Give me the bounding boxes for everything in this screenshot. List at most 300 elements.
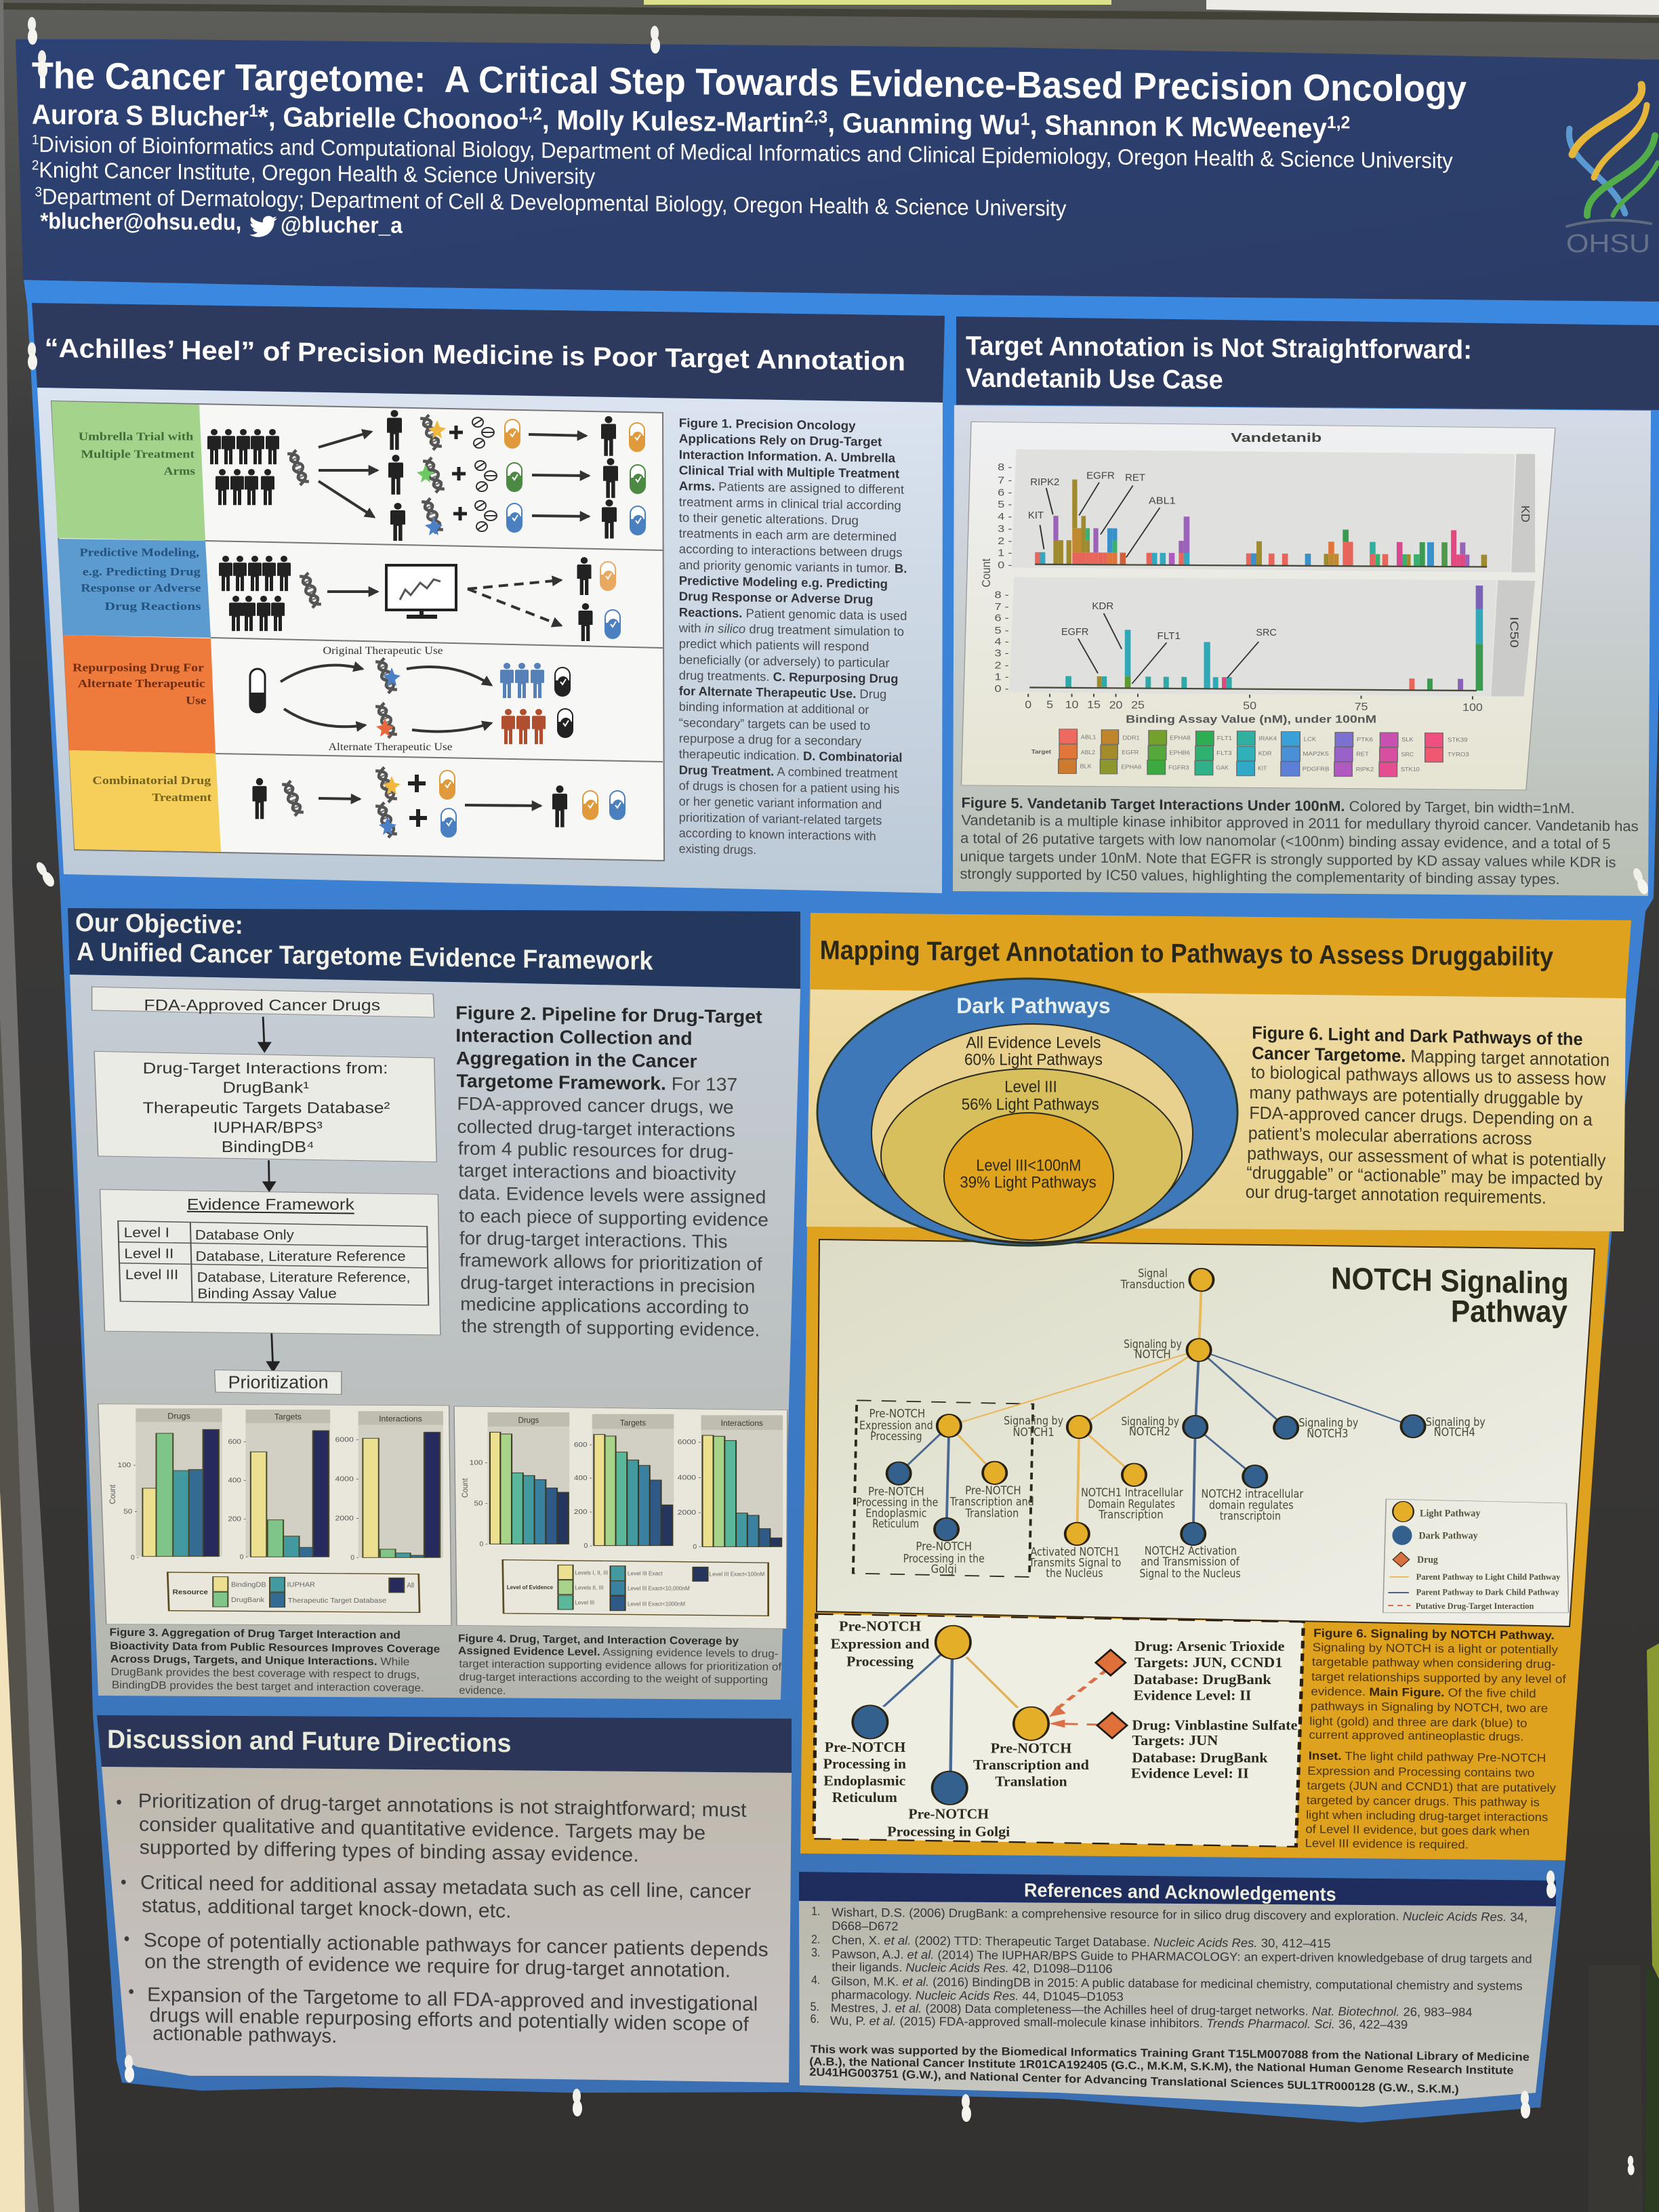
node labels: NOTCH1 Intracellular	[1081, 1487, 1183, 1499]
figure 5 chart: SLK	[1401, 737, 1414, 743]
drug diamonds and arrows	[1049, 1650, 1127, 1738]
box: evidence framework table: Evidence Framework	[187, 1196, 354, 1213]
figure 5 chart	[961, 422, 1555, 790]
category labels: Arms	[163, 465, 195, 478]
node labels: Signaling by	[1121, 1416, 1179, 1428]
figure 4 bar chart: 0 -	[584, 1542, 592, 1549]
row A icons	[207, 410, 645, 541]
panel header	[956, 316, 1659, 410]
drug annotations: Database: DrugBank	[1134, 1672, 1271, 1687]
figure 4 legend: Level III Exact<1000nM	[628, 1601, 685, 1607]
figure 2 caption: medicine applications according to	[460, 1294, 749, 1318]
figure 4 bar chart: 6000 -	[678, 1439, 701, 1446]
panel: references and acknowledgements	[799, 1872, 1556, 2107]
figure 1 caption: Clinical Trial with Multiple Treatment	[679, 463, 899, 480]
bullet list: on the strength of evidence we require for drug-target annotation.	[144, 1950, 731, 1982]
axes labels: 25	[1131, 699, 1145, 712]
box: data sources: Drug-Target Interactions from:	[143, 1060, 388, 1078]
category labels: Drug Reactions	[105, 600, 201, 613]
figure 1 caption: Applications Rely on Drug-Target	[679, 431, 882, 449]
nested ellipse diagram: 39% Light Pathways	[960, 1173, 1097, 1191]
arrow	[259, 1017, 270, 1051]
node labels: transcriptoin	[1220, 1510, 1281, 1523]
figure 2 caption: framework allows for prioritization of	[459, 1250, 762, 1275]
figure 1 caption: or her genetic variant information and	[679, 794, 882, 812]
figure 5 chart: FLT3	[1216, 751, 1232, 756]
heading: A Unified Cancer Targetome Evidence Framework	[77, 937, 653, 976]
dashed inset marker	[853, 1400, 1033, 1577]
facet IC50: 2 -	[995, 659, 1009, 671]
figure 2 caption: for drug-target interactions. This	[459, 1228, 728, 1252]
authors: Aurora S Blucher	[32, 99, 1103, 141]
panel header	[32, 303, 945, 403]
category: repurposing	[63, 635, 216, 754]
figure 4 bar chart: 200 -	[574, 1509, 592, 1516]
references list: Chen, X. et al. (2002) TTD: Therapeutic Target Database. Nucleic Acids Res. 30, 412–415	[832, 1933, 1331, 1950]
figure 2 caption: Figure 2. Pipeline for Drug-Target	[455, 1003, 762, 1027]
arrow	[267, 1334, 279, 1371]
network legend: Putative Drug-Target Interaction	[1416, 1602, 1534, 1611]
facet KD: 0 -	[998, 559, 1012, 571]
title and authors: 1,2	[1327, 112, 1350, 132]
figure 3 legend	[167, 1572, 419, 1612]
KD annotations: KIT	[1028, 509, 1044, 520]
axes labels: 15	[1087, 699, 1101, 711]
figure 3 bar chart: 600 -	[228, 1438, 246, 1446]
figure 5 chart: PTK6	[1357, 737, 1373, 743]
figure 3 legend: BindingDB	[231, 1581, 266, 1589]
figure 5 chart: FGFR3	[1168, 765, 1189, 771]
axes labels: 0	[1025, 699, 1031, 711]
node labels: NOTCH4	[1434, 1427, 1475, 1439]
network edges	[899, 1280, 1413, 1534]
facet IC50	[995, 577, 1535, 696]
figure 8 caption on orange: evidence. Main Figure. Of the five child	[1311, 1685, 1536, 1700]
facet IC50: 3 -	[995, 647, 1009, 659]
figure 4 bar chart: 400 -	[574, 1475, 592, 1482]
figure 5 chart: GAK	[1216, 765, 1229, 771]
box: data sources: Therapeutic Targets Database²	[143, 1099, 390, 1117]
figure 8 caption on orange	[1305, 1626, 1566, 1852]
figure 5 chart: LCK	[1304, 737, 1316, 743]
row C icons: Original Therapeutic Use	[323, 645, 443, 657]
figure 3 caption	[109, 1626, 440, 1694]
affiliations: 3	[35, 184, 42, 199]
node labels: Processing	[870, 1431, 922, 1443]
category labels: e.g. Predicting Drug	[83, 566, 201, 578]
category: predictive modeling	[58, 539, 211, 638]
figure 4 legend	[503, 1560, 769, 1616]
axes labels: 100	[1462, 701, 1483, 714]
figure 4 bar chart: Drugs	[518, 1416, 539, 1425]
box: FDA approved drugs: FDA-Approved Cancer Drugs	[144, 997, 380, 1015]
figure 2 caption	[455, 1003, 769, 1340]
drug annotations: Targets: JUN, CCND1	[1134, 1655, 1283, 1671]
references list: 6.	[811, 2011, 819, 2026]
facet IC50: 4 -	[995, 636, 1009, 647]
drug annotations: Drug: Arsenic Trioxide	[1134, 1639, 1285, 1654]
inset labels: Pre-NOTCH	[991, 1741, 1071, 1756]
authors: 1	[1021, 109, 1030, 129]
figure 5 chart: ABL2	[1081, 750, 1095, 756]
KD annotations: EGFR	[1086, 470, 1115, 481]
top edge strip	[0, 0, 1659, 23]
figure 5 chart: EPHB6	[1169, 750, 1190, 756]
facet IC50: 8 -	[995, 589, 1009, 600]
figure 1 caption: prioritization of variant-related targets	[679, 810, 882, 827]
figure 1 caption: of drugs is chosen for a patient using his	[679, 778, 899, 796]
node labels: NOTCH2 intracellular	[1202, 1488, 1304, 1500]
figure 4 bar chart	[454, 1406, 787, 1629]
references list	[811, 1904, 1532, 2032]
figure 2 caption: Targetome Framework. For 137	[457, 1071, 737, 1095]
figure 1 caption: Drug Treatment. A combined treatment	[679, 762, 898, 781]
figure 4 legend: Level III Exact<10,000nM	[628, 1586, 690, 1592]
figure 1 caption: predict which patients will respond	[679, 636, 869, 654]
figure 3 legend: Therapeutic Target Database	[288, 1597, 386, 1604]
facet KD: 7 -	[998, 474, 1012, 486]
drug annotations: Database: DrugBank	[1132, 1750, 1268, 1765]
category labels: Use	[186, 695, 206, 707]
figure 4 caption	[458, 1633, 782, 1700]
box: evidence framework table: Binding Assay Value	[197, 1286, 337, 1301]
bullet list: Critical need for additional assay metadata such as cell line, cancer	[140, 1871, 751, 1903]
node labels: NOTCH2 Activation	[1145, 1545, 1237, 1557]
node labels: Signaling by	[1004, 1415, 1063, 1427]
panel body	[70, 975, 800, 1700]
category: combinatorial	[69, 750, 221, 852]
KD annotations	[1028, 470, 1176, 520]
box: evidence framework table	[100, 1189, 441, 1335]
figure 5 chart: EPHA8	[1170, 735, 1191, 741]
inset edges	[884, 1655, 952, 1771]
figure 5 chart: EPHA6	[1121, 764, 1142, 771]
facet IC50: 7 -	[995, 600, 1009, 612]
figure 4 legend: Level III	[575, 1600, 594, 1606]
figure 5 chart: FLT1	[1217, 736, 1232, 742]
node labels: the Nucleus	[1046, 1568, 1103, 1580]
category labels: Treatment	[152, 792, 212, 804]
node labels: Transcription	[1099, 1509, 1164, 1521]
header banner	[16, 39, 1659, 302]
node labels: Transmits Signal to	[1029, 1557, 1121, 1570]
references list: 2.	[811, 1932, 820, 1946]
figure 4 caption: evidence.	[459, 1684, 506, 1697]
box: evidence framework table: Level I	[124, 1225, 169, 1240]
figure 4 legend: Level III Exact	[628, 1570, 663, 1576]
axes labels: Binding Assay Value (nM), under 100nM	[1126, 714, 1376, 726]
heading: Discussion and Future Directions	[107, 1725, 511, 1758]
figure 5 chart: MAP2K5	[1303, 751, 1329, 757]
figure 3 bar chart: 2000 -	[335, 1515, 359, 1522]
authors: 2,3	[804, 106, 827, 127]
figure 1 caption	[678, 415, 907, 859]
node labels: Pre-NOTCH	[965, 1484, 1021, 1497]
bullet list: Scope of potentially actionable pathways for cancer patients depends	[144, 1929, 769, 1961]
authors: 1,2	[519, 104, 542, 123]
node labels: Reticulum	[872, 1517, 919, 1530]
facet KD: 1 -	[998, 547, 1012, 558]
cream body	[806, 989, 1626, 1231]
node labels: Golgi	[931, 1563, 957, 1576]
references list: 4.	[811, 1973, 820, 1987]
facet IC50: 0 -	[995, 682, 1009, 694]
box: evidence framework table: Level II	[124, 1246, 173, 1261]
figure 4 legend: Levels II, III	[575, 1584, 603, 1591]
figure 5 chart: STK39	[1448, 737, 1468, 743]
figure 1 caption: drug treatments. C. Repurposing Drug	[679, 668, 898, 686]
inset labels: Expression and	[831, 1637, 930, 1652]
figure 2 caption: data. Evidence levels were assigned	[458, 1183, 766, 1208]
figure 5 caption: Figure 5. Vandetanib Target Interactions Under 100nM. Colored by Target, bin width=1nM.	[961, 794, 1574, 817]
figure 1 caption: Interaction Information. A. Umbrella	[679, 447, 896, 465]
figure 2 caption: drug-target interactions in precision	[460, 1273, 755, 1297]
figure 1 caption: treatment arms in clinical trial according	[679, 495, 901, 512]
acknowledgements	[809, 2043, 1530, 2096]
nested ellipse diagram: Dark Pathways	[956, 994, 1111, 1018]
box: prioritization	[215, 1370, 342, 1394]
figure 3 caption: Across Drugs, Targets, and Unique Interactions. While	[110, 1653, 409, 1668]
node labels: NOTCH1	[1012, 1426, 1054, 1439]
node labels: Signal to the Nucleus	[1140, 1568, 1241, 1580]
node labels	[856, 1267, 1486, 1580]
node labels: Transcription and	[949, 1496, 1034, 1509]
figure 4 bar chart: 100 -	[470, 1459, 488, 1467]
drug annotations: Evidence Level: II	[1131, 1765, 1249, 1781]
KD annotations: RIPK2	[1030, 476, 1059, 487]
figure 1 caption: Drug Response or Adverse Drug	[679, 589, 873, 607]
inset labels: Pre-NOTCH	[908, 1806, 989, 1822]
figure 5 chart: TYRO3	[1448, 752, 1469, 758]
references list: pharmacology. Nucleic Acids Res. 44, D1045–D1053	[831, 1988, 1124, 2003]
figure 5 chart: IRAK4	[1258, 736, 1277, 742]
figure 1 caption: “secondary” targets can be used to	[679, 715, 870, 733]
affiliations: 1	[32, 132, 39, 147]
panel body	[102, 1767, 792, 2083]
node labels: and Transmission of	[1141, 1556, 1240, 1568]
figure 4 caption: Figure 4. Drug, Target, and Interaction Coverage by	[458, 1633, 739, 1647]
panel body	[37, 388, 943, 893]
figure 5 chart: DDR1	[1122, 735, 1140, 741]
network title	[1331, 1261, 1569, 1328]
figure 2 caption: FDA-approved cancer drugs, we	[457, 1094, 734, 1118]
node labels: Pre-NOTCH	[869, 1408, 925, 1420]
figure 5 chart: STK10	[1401, 767, 1420, 773]
node labels: Signaling by	[1124, 1338, 1182, 1351]
figure 2 caption: collected drug-target interactions	[457, 1117, 735, 1141]
figure 3 caption: Figure 3. Aggregation of Drug Target Interaction and	[109, 1626, 401, 1641]
figure 2 caption: Interaction Collection and	[455, 1025, 693, 1049]
drug annotations: Targets: JUN	[1132, 1733, 1218, 1748]
facet KD: 8 -	[998, 461, 1012, 472]
nested ellipse diagram: All Evidence Levels	[966, 1033, 1101, 1052]
figure 4 bar chart: 2000 -	[678, 1509, 701, 1517]
IC50 annotations: EGFR	[1061, 626, 1088, 637]
figure 2 caption: target interactions and bioactivity	[458, 1160, 737, 1185]
node labels: Signal	[1138, 1267, 1168, 1279]
figure 3 bar chart: 0 -	[131, 1554, 139, 1561]
axes labels: 10	[1065, 699, 1079, 711]
facet KD: 5 -	[998, 498, 1012, 510]
icon: twitter bird	[249, 216, 277, 237]
figure 1 caption: Figure 1. Precision Oncology	[679, 415, 856, 433]
facet KD	[998, 449, 1535, 572]
figure 1 caption: for Alternate Therapeutic Use. Drug	[679, 684, 886, 701]
facet KD: KD	[1519, 506, 1532, 523]
facet IC50: 1 -	[995, 671, 1009, 682]
node labels: NOTCH3	[1307, 1428, 1348, 1440]
figure 3 bar chart: Interactions	[379, 1414, 422, 1423]
box: evidence framework table: Level III	[125, 1267, 178, 1282]
figure 5 chart: KDR	[1258, 751, 1272, 757]
references list: 3.	[811, 1945, 820, 1959]
pipeline flowchart	[92, 987, 441, 1394]
inset labels: Processing	[846, 1654, 914, 1669]
figure 4 bar chart: 0 -	[480, 1540, 488, 1548]
NOTCH signaling pathway network: Signaling by	[1426, 1416, 1486, 1429]
figure 1 caption: therapeutic indication. D. Combinatorial	[679, 747, 903, 764]
figure 2 caption: to each piece of supporting evidence	[459, 1206, 769, 1231]
figure 4 bar chart: 0 -	[693, 1543, 701, 1551]
inset labels: Translation	[995, 1774, 1067, 1789]
chart title: Vandetanib	[1231, 430, 1322, 445]
drug annotations: Evidence Level: II	[1134, 1687, 1251, 1703]
figure 5 chart: SRC	[1401, 752, 1414, 758]
figure 4 bar chart: 600 -	[574, 1441, 592, 1449]
axes labels	[979, 558, 1483, 726]
figure 5 chart: ABL1	[1081, 735, 1097, 741]
figure 5 caption	[960, 794, 1639, 888]
nested ellipse diagram: 56% Light Pathways	[962, 1095, 1099, 1113]
box: evidence framework table: Database, Literature Reference,	[197, 1270, 411, 1285]
row D icons	[252, 767, 625, 838]
axes labels: 75	[1355, 701, 1368, 713]
figure 3 bar chart: Drugs	[167, 1412, 190, 1420]
facet KD: 2 -	[998, 535, 1012, 546]
figure 3 legend: Resource	[173, 1589, 208, 1596]
orange panel base	[800, 913, 1631, 1860]
figure 1 caption: existing drugs.	[679, 841, 756, 857]
heading	[75, 908, 653, 976]
category labels	[73, 430, 212, 804]
OHSU logo: OHSU	[1566, 230, 1650, 258]
figure 3 bar chart: 200 -	[228, 1515, 246, 1523]
figure 6 caption	[1246, 1023, 1610, 1209]
target legend	[1059, 729, 1443, 777]
node labels: Transduction	[1120, 1279, 1185, 1291]
figure 1 caption: to their genetic alterations. Drug	[679, 510, 859, 527]
figure 1 caption: binding information at additional or	[679, 699, 869, 717]
title and authors: @blucher_a	[281, 212, 403, 238]
figure 5 chart: PDGFRB	[1303, 766, 1330, 773]
bullet list	[117, 1789, 769, 2054]
IC50 annotations	[1061, 600, 1277, 641]
IC50 annotations: KDR	[1092, 600, 1113, 611]
nested ellipse diagram: Level III	[1004, 1078, 1057, 1096]
figure 3 bar chart: Targets	[274, 1413, 302, 1422]
nested ellipse diagram: 60% Light Pathways	[964, 1050, 1103, 1069]
figure 3 bar chart: 6000 -	[335, 1436, 359, 1443]
figure 5 chart: Target	[1031, 750, 1052, 756]
node labels: Activated NOTCH1	[1030, 1546, 1120, 1559]
figure 3 legend: IUPHAR	[287, 1581, 315, 1589]
figure 1 caption: Reactions. Patient genomic data is used	[679, 605, 907, 623]
figure 3 legend: All	[407, 1582, 414, 1589]
panel: our objective evidence framework	[68, 908, 800, 1700]
facet KD: 6 -	[998, 486, 1012, 498]
panel: discussion and future directions	[97, 1715, 792, 2083]
figure 3 legend: DrugBank	[231, 1597, 264, 1603]
figure 1 caption: treatments in each arm are determined	[679, 526, 897, 544]
bullet list: drugs will enable repurposing efforts and potentially widen scope of	[149, 2004, 749, 2036]
figure 5 chart: BLK	[1080, 764, 1092, 770]
figure 5 chart: EGFR	[1122, 750, 1139, 756]
facet IC50: IC50	[1507, 617, 1521, 648]
figure 3 bar chart: 100 -	[118, 1462, 136, 1469]
figure 2 caption: from 4 public resources for drug-	[458, 1139, 734, 1162]
node labels: Expression and	[859, 1420, 933, 1432]
node labels: Domain Regulates	[1088, 1498, 1175, 1511]
figure 5 chart: KIT	[1258, 766, 1267, 772]
row separators	[205, 541, 663, 762]
node labels: Endoplasmic	[865, 1507, 926, 1520]
network legend: Light Pathway	[1420, 1509, 1481, 1519]
figure 3 caption: BindingDB provides the best target and interaction coverage.	[112, 1679, 424, 1694]
figure 3 bar chart: 0 -	[350, 1554, 359, 1561]
figure 4 bar chart: 4000 -	[678, 1474, 701, 1481]
category labels: Response or Adverse	[81, 582, 201, 594]
inset: pre-NOTCH expression and processing: Drug: Vinblastine Sulfate	[1132, 1718, 1298, 1733]
figure 1 caption: according to known interactions with	[679, 825, 876, 843]
right wall rail	[1589, 1643, 1659, 2212]
node labels: Processing in the	[903, 1553, 985, 1565]
box: data sources: DrugBank¹	[223, 1080, 309, 1097]
figure 1 caption: and priority genomic variants in tumor. B.	[679, 558, 907, 575]
panel header	[68, 908, 800, 989]
figure 1 caption: beneficially (or adversely) to particular	[679, 652, 890, 670]
figure 3 and 4 charts	[98, 1404, 787, 1629]
axes labels: 50	[1243, 700, 1256, 712]
category labels: Umbrella Trial with	[79, 430, 193, 443]
figure 2 caption: the strength of supporting evidence.	[462, 1316, 760, 1340]
panel header	[799, 1872, 1556, 1906]
KD annotations: RET	[1125, 472, 1145, 483]
figure 3 bar chart: 4000 -	[335, 1475, 359, 1483]
figure 4 caption: drug-target interactions according to the weight of supporting	[459, 1671, 768, 1686]
inset labels: Processing in Golgi	[887, 1824, 1010, 1839]
network legend: Drug	[1417, 1555, 1438, 1565]
authors: *, Gabrielle Choonoo	[258, 101, 519, 135]
axes labels: 5	[1046, 699, 1053, 711]
inset labels: Pre-NOTCH	[825, 1740, 905, 1755]
references list: 1.	[811, 1904, 820, 1918]
figure 4 bar chart: Interactions	[721, 1419, 763, 1428]
box: evidence framework table: Database Only	[195, 1227, 294, 1243]
references list: D668–D672	[832, 1919, 898, 1933]
figure 4 legend: Level of Evidence	[507, 1584, 553, 1591]
figure 3 caption: Bioactivity Data from Public Resources Improves Coverage	[110, 1640, 440, 1655]
figure 5 chart: RET	[1356, 752, 1369, 758]
box: FDA approved drugs	[92, 987, 434, 1017]
authors: 1	[249, 100, 258, 121]
node labels: Pre-NOTCH	[868, 1486, 924, 1498]
category labels: Predictive Modeling,	[79, 546, 199, 559]
affiliations: 2	[32, 158, 39, 173]
references list: their ligands. Nucleic Acids Res. 42, D1098–D1106	[832, 1960, 1113, 1975]
heading: Our Objective:	[75, 908, 243, 940]
category labels: Multiple Treatment	[81, 448, 195, 461]
IC50 annotations: FLT1	[1158, 630, 1181, 641]
